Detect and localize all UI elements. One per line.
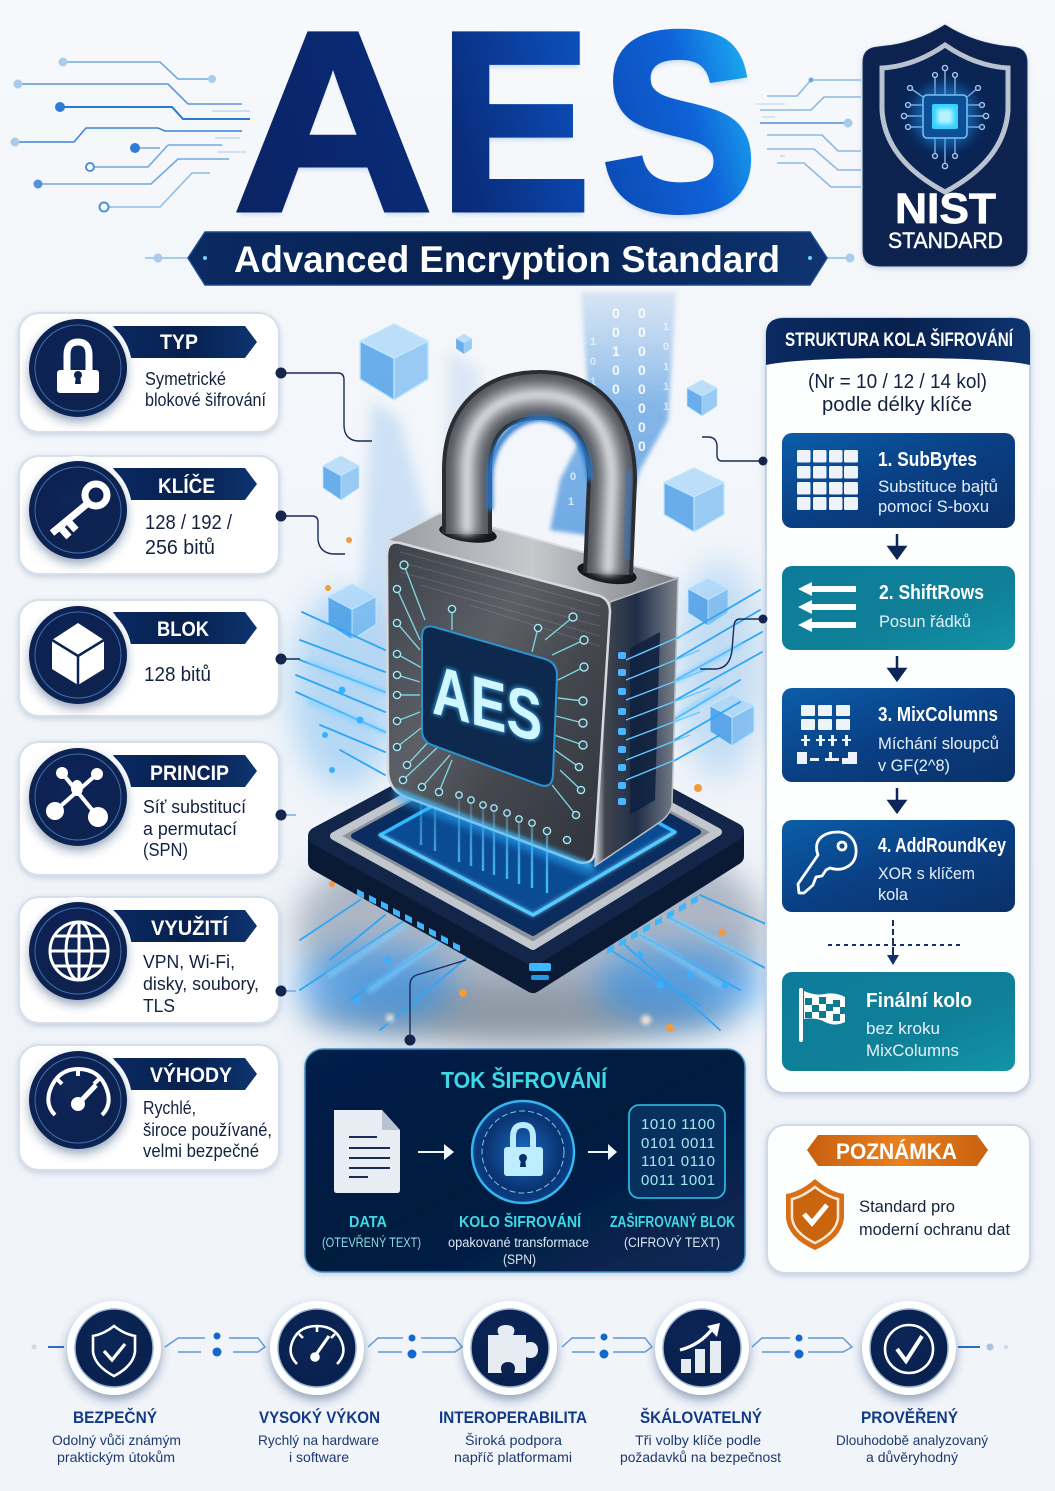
subtitle banner: Advanced Encryption Standard [234,239,780,280]
panel: TYP: Symetrické [145,369,226,389]
feature: scalable: požadavků na bezpečnost [620,1449,781,1465]
bottom connector lines [32,1332,1008,1358]
feature: interoperability [439,1301,587,1465]
binary stream column: 0 [638,419,646,435]
binary stream column [550,292,676,540]
step final round [782,972,1015,1071]
step 3 MixColumns: v GF(2^8) [878,756,950,775]
feature: scalable: ŠKÁLOVATELNÝ [640,1408,763,1427]
icon: shield check [93,1326,135,1376]
AES plate on padlock [422,626,557,786]
padlock shackle [467,395,630,574]
arrow [418,1144,454,1160]
panel: PRINCIP: PRINCIP [150,762,229,785]
panel: VÝHODY: velmi bezpečné [143,1141,259,1161]
panel: KLÍČE: KLÍČE [158,474,215,498]
binary stream column: 0 [638,305,646,321]
binary stream column: 1 [663,401,669,413]
binary stream column: 0 [638,400,646,416]
panel: encryption flow: TOK ŠIFROVÁNÍ [441,1066,608,1093]
chip platform [317,722,735,984]
feature: high performance: VYSOKÝ VÝKON [259,1408,380,1427]
panel: round structure [766,318,1030,1093]
binary block: 0011 1001 [641,1172,715,1189]
circuit beams around padlock [296,537,768,1032]
icon: outlined key [798,832,856,893]
panel: VYUŽITÍ: TLS [143,996,175,1016]
flow labels: opakované transformace [448,1235,589,1250]
icon: round with padlock [472,1101,574,1203]
feature: interoperability: INTEROPERABILITA [439,1408,587,1427]
icon: gauge [291,1326,343,1364]
feature: high performance: Rychlý na hardware [258,1432,379,1448]
panel: VÝHODY [19,1045,279,1170]
circuit lines: right of title [757,78,861,187]
feature: interoperability: Široká podpora [465,1432,562,1448]
panel: round structure: podle délky klíče [822,394,972,416]
binary stream column: 1 [663,381,669,393]
icon: cube [52,623,104,685]
panel: KLÍČE [19,456,279,574]
panel: KLÍČE: 128 / 192 / [145,512,232,534]
panel: KLÍČE: 256 bitů [145,537,215,559]
binary stream column: 0 [638,438,646,454]
feature: high performance: i software [289,1449,349,1465]
AES plate on padlock: AES [432,651,542,758]
step final round: MixColumns [866,1041,959,1060]
binary block: 0101 0011 [641,1135,715,1152]
step final round: Finální kolo [866,990,972,1012]
flow labels: (SPN) [503,1252,536,1267]
arrow [588,1144,617,1160]
AES plate on padlock: AES [432,651,542,758]
step 4 AddRoundKey [782,820,1015,912]
flow labels: DATA [349,1214,387,1231]
padlock body [387,543,710,866]
flow labels: KOLO ŠIFROVÁNÍ [459,1212,581,1231]
icon: puzzle piece [488,1325,538,1373]
feature: proven [836,1301,988,1465]
feature: secure: praktickým útokům [57,1449,175,1465]
connector lines from cards to padlock [276,368,768,1046]
feature: proven: Dlouhodobě analyzovaný [836,1432,988,1448]
step 3 MixColumns: Míchání sloupců [878,734,999,753]
note banner: POZNÁMKA [836,1139,957,1164]
icon: speedometer [48,1069,109,1115]
binary stream column: 0 [612,362,620,378]
binary stream column: 1 [612,343,620,359]
flow labels [322,1212,735,1267]
icon: document [334,1110,400,1193]
lock circuit traces [393,561,595,893]
arrow [889,656,905,680]
feature: secure [52,1301,181,1465]
step final round: bez kroku [866,1019,940,1038]
binary stream column: 0 [638,381,646,397]
panel header [766,318,1030,365]
panel: VYUŽITÍ: VYUŽITÍ [151,916,229,940]
panel: note: moderní ochranu dat [859,1220,1010,1239]
panel: TYP: TYP [160,331,198,354]
icon: circled check [885,1325,933,1373]
background glow and floor [290,350,765,1040]
subtitle banner [145,232,854,285]
step 2 ShiftRows [782,566,1015,650]
icon: key [52,484,107,537]
binary stream column: 0 [612,305,620,321]
step 3 MixColumns [782,688,1015,782]
panel: BLOK: BLOK [157,618,209,641]
step 1 SubBytes: Substituce bajtů [878,477,998,496]
flow labels: ZAŠIFROVANÝ BLOK [610,1212,735,1231]
panel: BLOK: 128 bitů [144,664,211,686]
panel: TYP: blokové šifrování [145,390,266,410]
panel: VÝHODY: široce používané, [143,1120,272,1140]
feature: secure: Odolný vůči známým [52,1432,181,1448]
flow labels: (OTEVŘENÝ TEXT) [322,1235,421,1250]
main title AES [233,0,758,270]
central illustration: encrypted AES padlock on chip [290,292,768,1040]
panel: VYUŽITÍ: disky, soubory, [143,974,259,994]
binary stream column: 1 [590,376,596,388]
arrow [889,534,905,558]
step 3 MixColumns: 3. MixColumns [878,704,998,726]
NIST standard badge: STANDARD [888,228,1003,253]
binary stream column: 1 [663,361,669,373]
arrow [889,788,905,812]
binary stream column: 1 [568,496,574,508]
step 4 AddRoundKey: XOR s klíčem [878,864,975,883]
panel: encryption flow [305,1049,745,1272]
feature: proven: PROVĚŘENÝ [861,1408,959,1427]
step 4 AddRoundKey: kola [878,885,909,904]
binary block: 1010 1100 [641,1116,715,1133]
binary stream column: 0 [590,356,596,368]
panel: TYP [19,313,279,432]
panel: note: Standard pro [859,1197,955,1216]
panel: PRINCIP: a permutací [143,819,237,839]
icon: globe [50,922,108,980]
icon: network nodes [46,767,108,827]
binary block: 1101 0110 [641,1153,715,1170]
flow labels: (CIFROVÝ TEXT) [624,1235,720,1250]
panel: BLOK [19,600,279,716]
panel: PRINCIP: (SPN) [143,840,188,860]
icon: growth bars [680,1323,721,1373]
feature: scalable [620,1301,781,1465]
step 2 ShiftRows: Posun řádků [879,612,971,631]
step 1 SubBytes [782,433,1015,528]
panel: PRINCIP [19,742,279,875]
NIST standard badge [863,25,1027,266]
panel: VYUŽITÍ: VPN, Wi-Fi, [143,952,235,972]
binary stream column: 1 [590,336,596,348]
binary stream column: 0 [612,324,620,340]
panel: PRINCIP: Síť substitucí [143,797,246,817]
icon: byte grid [797,450,858,510]
icon: checkered flag [799,988,845,1042]
floating data cubes [323,324,754,746]
panel: note [767,1125,1030,1273]
binary stream column: 1 [663,321,669,333]
binary stream column: 0 [638,324,646,340]
padlock top face [387,513,678,610]
binary block [629,1105,725,1198]
shield with chip [882,45,1008,192]
binary stream column: 0 [612,381,620,397]
icon: mix columns [797,705,857,764]
NIST standard badge: NIST [895,185,996,233]
icon: padlock [57,342,99,393]
panel: round structure: (Nr = 10 / 12 / 14 kol) [808,371,987,393]
feature: proven: a důvěryhodný [866,1449,958,1465]
step 2 ShiftRows: 2. ShiftRows [879,582,984,604]
icon: orange shield [786,1179,844,1250]
circuit lines: left of title [10,58,250,212]
binary stream column: 0 [638,343,646,359]
dashed connector [828,920,960,965]
feature: interoperability: napříč platformami [454,1449,572,1465]
binary stream column: 0 [570,471,576,483]
feature: secure: BEZPEČNÝ [73,1408,158,1427]
panel: VÝHODY: Rychlé, [143,1098,196,1118]
panel: VYUŽITÍ [19,897,279,1023]
feature: scalable: Tři volby klíče podle [635,1432,761,1448]
panel: VÝHODY: VÝHODY [150,1063,232,1087]
step 4 AddRoundKey: 4. AddRoundKey [878,835,1007,857]
binary stream column: 0 [638,362,646,378]
note banner [807,1135,988,1166]
icon: shift arrows [798,582,856,632]
feature: high performance [258,1301,380,1465]
step 1 SubBytes: 1. SubBytes [878,449,977,471]
binary stream column: 0 [663,341,669,353]
step 1 SubBytes: pomocí S-boxu [878,497,989,516]
